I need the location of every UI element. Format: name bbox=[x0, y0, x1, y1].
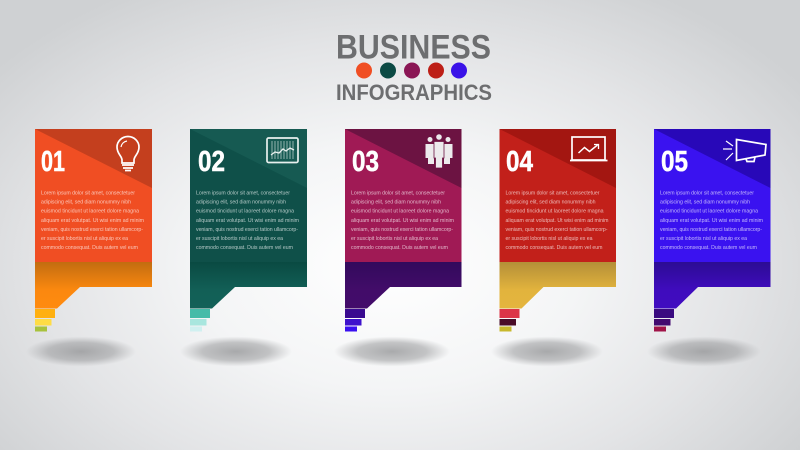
text block: er suscipit lobortis nisl ut aliquip ex ea bbox=[351, 236, 438, 242]
icon: megaphone bbox=[723, 140, 766, 162]
text block bbox=[351, 190, 454, 251]
text block: veniam, quis nostrud exerci tation ullamcorp- bbox=[506, 227, 608, 233]
panel: step 05 bbox=[654, 129, 770, 332]
text block: Lorem ipsum dolor sit amet, consectetuer bbox=[196, 190, 290, 196]
icon: chart monitor bbox=[267, 138, 298, 162]
diagonal band bbox=[500, 129, 616, 188]
card body bbox=[500, 129, 616, 262]
text block: commodo consequat. Duis autem vel eum bbox=[660, 245, 757, 251]
text block: commodo consequat. Duis autem vel eum bbox=[41, 245, 138, 251]
icon: group of people bbox=[426, 134, 452, 168]
text block: aliquam erat volutpat. Ut wisi enim ad minim bbox=[351, 218, 454, 224]
text block: aliquam erat volutpat. Ut wisi enim ad minim bbox=[660, 218, 763, 224]
shadow 5 bbox=[647, 336, 761, 366]
text block: adipiscing elit, sed diam nonummy nibh bbox=[196, 200, 286, 206]
text block: veniam, quis nostrud exerci tation ullamcorp- bbox=[41, 227, 143, 233]
text block: veniam, quis nostrud exerci tation ullamcorp- bbox=[351, 227, 453, 233]
text block bbox=[196, 190, 299, 251]
text block: euismod tincidunt ut laoreet dolore magna bbox=[196, 209, 294, 215]
text block: Lorem ipsum dolor sit amet, consectetuer bbox=[351, 190, 445, 196]
diagonal band bbox=[190, 129, 307, 188]
text block: aliquam erat volutpat. Ut wisi enim ad minim bbox=[506, 218, 608, 224]
text block bbox=[660, 190, 763, 251]
lower tab bbox=[190, 262, 307, 308]
number: 04 bbox=[506, 146, 533, 178]
title: Business Infographics bbox=[336, 28, 492, 105]
card body bbox=[345, 129, 462, 262]
shadow 3 bbox=[334, 336, 450, 366]
diagonal band bbox=[345, 129, 462, 188]
panel: step 02 bbox=[190, 129, 307, 332]
text block: adipiscing elit, sed diam nonummy nibh bbox=[351, 200, 441, 206]
text block: er suscipit lobortis nisl ut aliquip ex ea bbox=[41, 236, 128, 242]
icon: presentation screen bbox=[570, 137, 608, 160]
diagonal band bbox=[35, 129, 152, 188]
stacked steps bbox=[500, 309, 520, 332]
lower tab bbox=[345, 262, 462, 308]
shadow 1 bbox=[26, 336, 136, 366]
text block: er suscipit lobortis nisl ut aliquip ex ea bbox=[660, 236, 747, 242]
text block: euismod tincidunt ut laoreet dolore magna bbox=[41, 209, 139, 215]
text block: Lorem ipsum dolor sit amet, consectetuer bbox=[41, 190, 135, 196]
text block: commodo consequat. Duis autem vel eum bbox=[506, 245, 602, 251]
text block: commodo consequat. Duis autem vel eum bbox=[196, 245, 293, 251]
panel: step 04 bbox=[500, 129, 616, 332]
number: 03 bbox=[352, 146, 379, 178]
text block: euismod tincidunt ut laoreet dolore magna bbox=[660, 209, 758, 215]
heading: INFOGRAPHICS: INFOGRAPHICS bbox=[336, 80, 492, 105]
text block: adipiscing elit, sed diam nonummy nibh bbox=[506, 200, 596, 206]
number: 02 bbox=[198, 146, 225, 178]
text block: euismod tincidunt ut laoreet dolore magna bbox=[506, 209, 604, 215]
card body bbox=[654, 129, 770, 262]
text block: aliquam erat volutpat. Ut wisi enim ad minim bbox=[41, 218, 144, 224]
number: 01 bbox=[41, 146, 65, 178]
text block: adipiscing elit, sed diam nonummy nibh bbox=[660, 200, 750, 206]
lower tab bbox=[35, 262, 152, 308]
text block: euismod tincidunt ut laoreet dolore magna bbox=[351, 209, 449, 215]
icon: light bulb bbox=[117, 136, 139, 170]
stacked steps bbox=[345, 309, 365, 332]
text block: er suscipit lobortis nisl ut aliquip ex ea bbox=[196, 236, 283, 242]
text block bbox=[41, 190, 144, 251]
coloured dots bbox=[356, 62, 467, 78]
lower tab bbox=[500, 262, 616, 308]
stacked steps bbox=[35, 309, 55, 332]
panel: step 01 bbox=[35, 129, 152, 332]
text block: veniam, quis nostrud exerci tation ullamcorp- bbox=[196, 227, 298, 233]
panel: step 03 bbox=[345, 129, 462, 332]
number: 05 bbox=[661, 146, 688, 178]
text block: veniam, quis nostrud exerci tation ullamcorp- bbox=[660, 227, 762, 233]
shadow 4 bbox=[491, 336, 603, 366]
text block: er suscipit lobortis nisl ut aliquip ex ea bbox=[506, 236, 593, 242]
text block: adipiscing elit, sed diam nonummy nibh bbox=[41, 200, 131, 206]
stacked steps bbox=[654, 309, 674, 332]
diagonal band bbox=[654, 129, 770, 188]
stacked steps bbox=[190, 309, 210, 332]
shadow 2 bbox=[180, 336, 292, 366]
lower tab bbox=[654, 262, 770, 308]
text block: aliquam erat volutpat. Ut wisi enim ad minim bbox=[196, 218, 299, 224]
text block: commodo consequat. Duis autem vel eum bbox=[351, 245, 448, 251]
card body bbox=[190, 129, 307, 262]
heading: BUSINESS: BUSINESS bbox=[336, 28, 491, 66]
text block: Lorem ipsum dolor sit amet, consectetuer bbox=[506, 190, 600, 196]
card body bbox=[35, 129, 152, 262]
text block bbox=[506, 190, 608, 251]
text block: Lorem ipsum dolor sit amet, consectetuer bbox=[660, 190, 754, 196]
